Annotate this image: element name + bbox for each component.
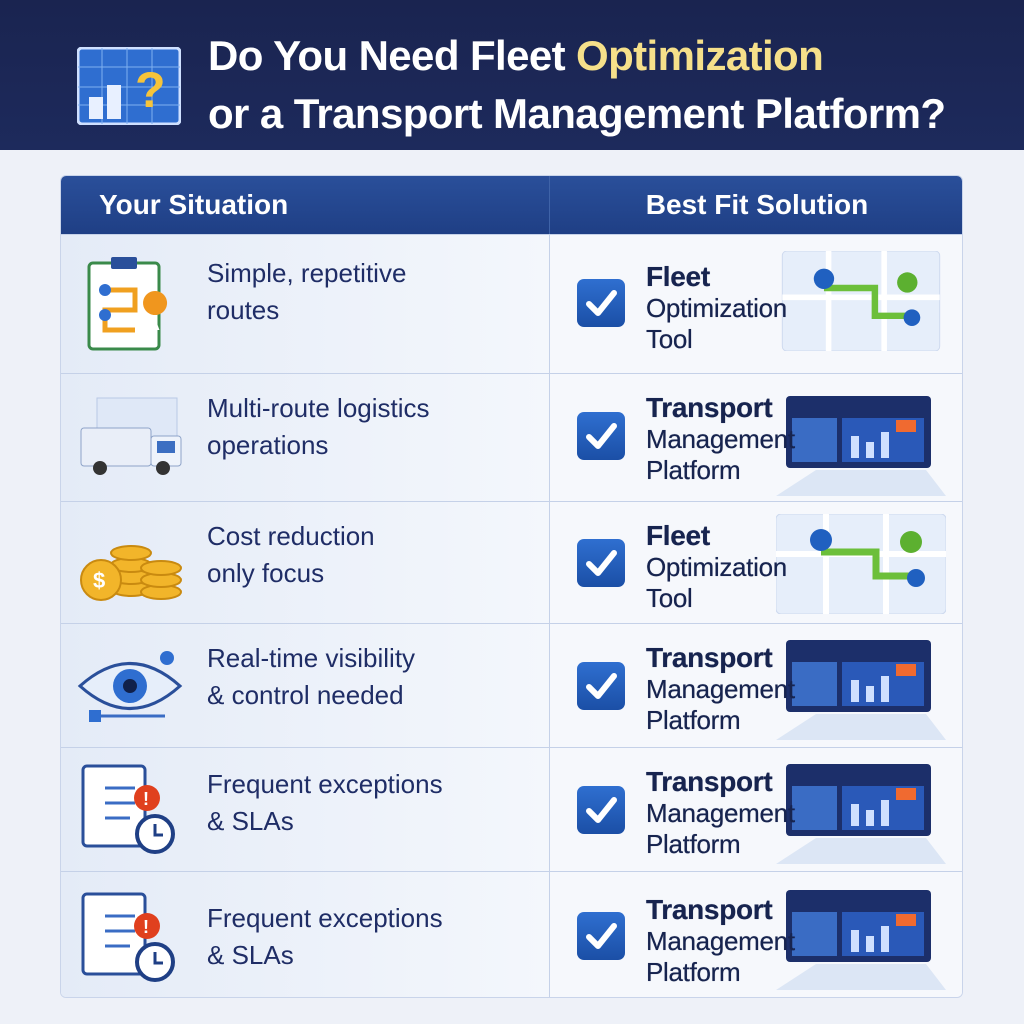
row 2: operations bbox=[207, 430, 328, 460]
solution text bbox=[646, 392, 796, 485]
solution text bbox=[646, 520, 787, 613]
dashboard image bbox=[776, 640, 946, 740]
icon: truck bbox=[80, 398, 182, 475]
solution text: Optimization bbox=[646, 552, 787, 582]
icon: eye bbox=[78, 651, 182, 722]
solution text bbox=[646, 766, 796, 859]
dashboard image bbox=[776, 764, 946, 864]
row 4: Real-time visibility bbox=[207, 643, 415, 673]
row 5 bbox=[61, 747, 964, 871]
text: routes bbox=[207, 295, 279, 325]
icon: coins bbox=[80, 545, 182, 601]
solution text: Transport bbox=[646, 392, 772, 423]
solution text: Management bbox=[646, 798, 795, 828]
row 5: & SLAs bbox=[207, 806, 294, 836]
solution text bbox=[646, 261, 787, 354]
row 6 bbox=[61, 871, 964, 999]
solution text: Transport bbox=[646, 642, 772, 673]
solution text: Fleet bbox=[646, 261, 710, 292]
icon: clipboard alert bbox=[82, 892, 175, 982]
icon: route clipboard: A bbox=[149, 317, 160, 334]
dashboard image bbox=[776, 396, 946, 496]
title: Do You Need Fleet Optimization bbox=[208, 32, 823, 79]
row 2: Multi-route logistics bbox=[207, 393, 430, 423]
row 2 bbox=[61, 373, 964, 501]
solution text: Management bbox=[646, 674, 795, 704]
text: Simple, repetitive bbox=[207, 258, 406, 288]
comparison table bbox=[60, 175, 963, 998]
header: your situation bbox=[61, 176, 549, 234]
solution text: Platform bbox=[646, 829, 740, 859]
solution text: Platform bbox=[646, 957, 740, 987]
row 4: & control needed bbox=[207, 680, 404, 710]
dashboard image bbox=[776, 890, 946, 990]
header: best fit solution bbox=[549, 176, 964, 234]
title: or a Transport Management Platform? bbox=[208, 90, 945, 137]
row 3: only focus bbox=[207, 558, 324, 588]
solution text bbox=[646, 894, 796, 987]
row 3 bbox=[61, 501, 964, 623]
solution text: Transport bbox=[646, 766, 772, 797]
header banner bbox=[0, 0, 1024, 150]
solution text bbox=[646, 642, 796, 735]
row 5: Frequent exceptions bbox=[207, 769, 443, 799]
icon: chart question bbox=[77, 47, 181, 125]
checkbox bbox=[577, 279, 625, 327]
text bbox=[207, 258, 406, 325]
solution text: Platform bbox=[646, 705, 740, 735]
solution text: Tool bbox=[646, 583, 692, 613]
row 6: & SLAs bbox=[207, 940, 294, 970]
solution text: Management bbox=[646, 424, 795, 454]
solution text: Platform bbox=[646, 455, 740, 485]
icon: coins: $ bbox=[93, 568, 105, 593]
map image bbox=[776, 514, 946, 614]
icon: chart question: ? bbox=[135, 62, 166, 118]
icon: route clipboard bbox=[88, 257, 168, 350]
title bbox=[208, 32, 945, 137]
row 3: Cost reduction bbox=[207, 521, 375, 551]
header: best fit solution: Best Fit Solution bbox=[646, 189, 868, 220]
map image bbox=[782, 251, 940, 351]
solution text: Tool bbox=[646, 324, 692, 354]
solution text: Optimization bbox=[646, 293, 787, 323]
solution text: Fleet bbox=[646, 520, 710, 551]
icon: clipboard alert: ! bbox=[143, 789, 149, 809]
icon: clipboard alert bbox=[82, 764, 175, 854]
icon: clipboard alert: ! bbox=[143, 917, 149, 937]
header: your situation: Your Situation bbox=[99, 189, 288, 220]
row 4 bbox=[61, 623, 964, 747]
row 1 bbox=[61, 234, 964, 373]
row 6: Frequent exceptions bbox=[207, 903, 443, 933]
solution text: Management bbox=[646, 926, 795, 956]
solution text: Transport bbox=[646, 894, 772, 925]
